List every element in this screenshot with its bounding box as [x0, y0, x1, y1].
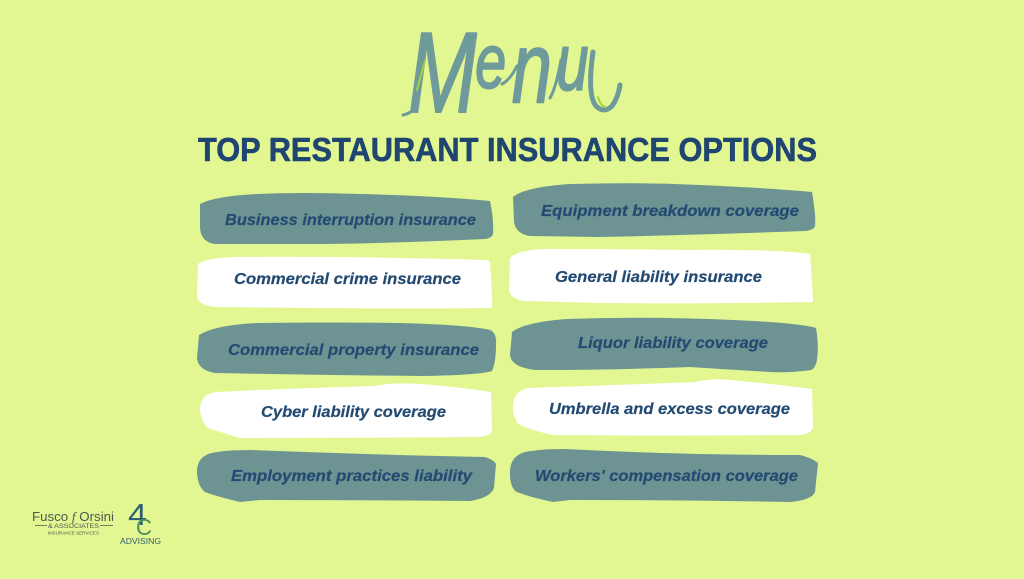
menu item: Business interruption insurance: Business interruption insurance	[225, 212, 476, 229]
menu item: Commercial property insurance	[197, 322, 496, 376]
menu item: Cyber liability coverage	[200, 383, 492, 438]
logo: 4C Advising: C	[136, 514, 152, 540]
menu item: Umbrella and excess coverage	[513, 379, 813, 436]
menu item: Commercial property insurance: Commercial property insurance	[228, 342, 479, 359]
logo: 4C Advising: ADVISING	[120, 537, 161, 546]
logo: Fusco Orsini and Associates: INSURANCE SERVICES	[48, 530, 99, 536]
script heading: Menu: u	[557, 18, 589, 107]
menu item: Commercial crime insurance	[197, 257, 492, 308]
script heading: Menu: e	[475, 19, 506, 105]
title: TOP RESTAURANT INSURANCE OPTIONS	[198, 132, 817, 169]
menu item: Liquor liability coverage	[510, 318, 818, 372]
menu item: Workers' compensation coverage	[510, 449, 818, 502]
menu item: Workers' compensation coverage: Workers' compensation coverage	[535, 468, 798, 485]
menu item: Business interruption insurance	[200, 193, 493, 244]
logo: Fusco Orsini and Associates: & ASSOCIATES	[48, 523, 100, 530]
menu item: Commercial crime insurance: Commercial crime insurance	[234, 271, 461, 288]
logo: 4C Advising: 4	[128, 497, 147, 532]
logo: 4C Advising	[120, 497, 161, 546]
menu item: Umbrella and excess coverage: Umbrella and excess coverage	[549, 401, 790, 418]
script heading: Menu: M	[408, 10, 477, 137]
script heading: Menu: n	[512, 12, 552, 124]
menu item: Equipment breakdown coverage	[513, 183, 815, 237]
logo: Fusco Orsini and Associates: Fusco f Orsini	[32, 509, 114, 524]
menu item: Liquor liability coverage: Liquor liability coverage	[578, 335, 768, 352]
script heading: Menu	[403, 10, 620, 137]
logo: Fusco Orsini and Associates	[32, 509, 114, 536]
menu item: General liability insurance: General liability insurance	[555, 269, 762, 286]
menu item: Equipment breakdown coverage: Equipment breakdown coverage	[541, 203, 799, 220]
menu item: Cyber liability coverage: Cyber liability coverage	[261, 404, 446, 421]
menu item: General liability insurance	[509, 249, 813, 303]
menu item: Employment practices liability	[197, 450, 496, 502]
menu item: Employment practices liability: Employment practices liability	[231, 468, 473, 485]
